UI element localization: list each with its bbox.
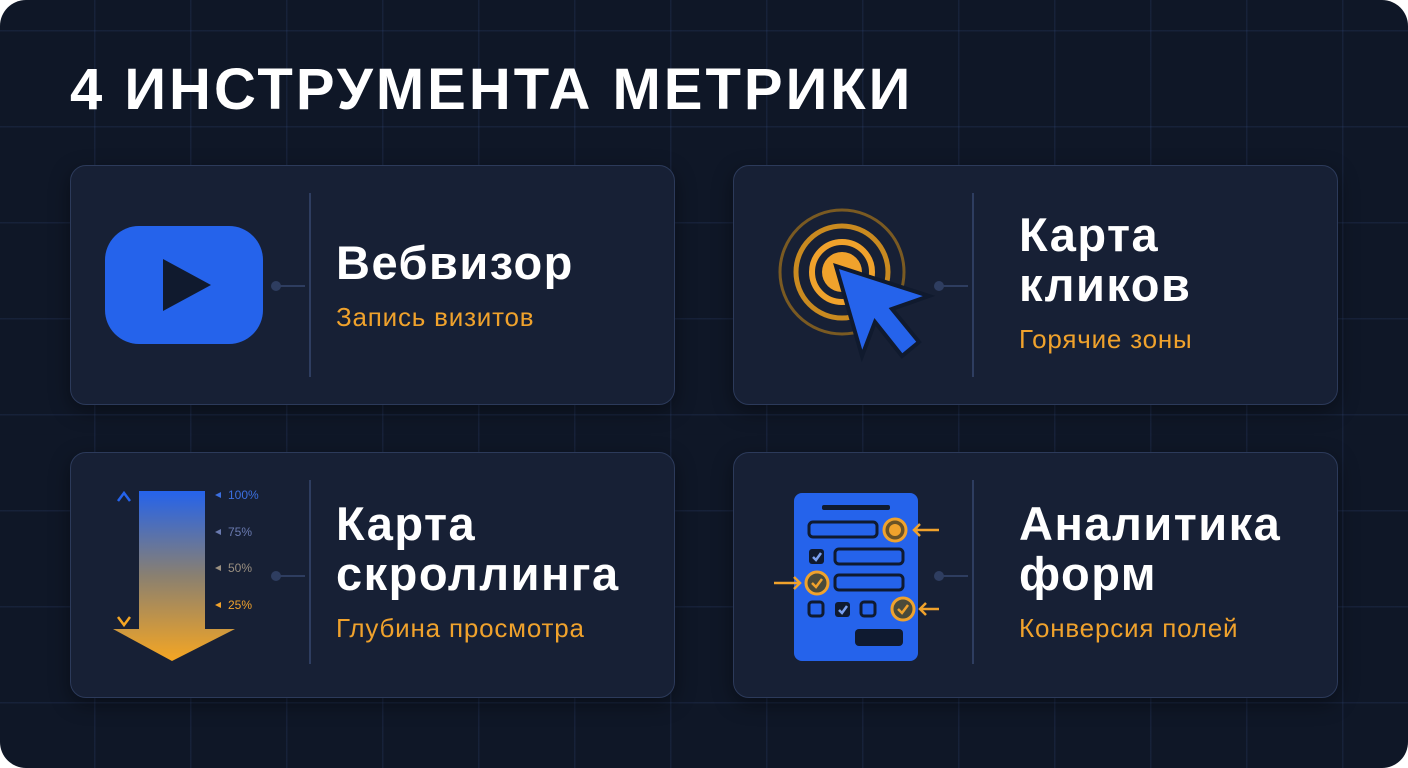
icon: scroll gradient arrow: 100% bbox=[228, 488, 259, 502]
panel: scroll map bbox=[70, 452, 675, 698]
icon: cursor with target bbox=[778, 208, 923, 354]
title: 4 ИНСТРУМЕНТА МЕТРИКИ bbox=[70, 57, 913, 122]
panel: form analytics bbox=[733, 452, 1338, 698]
text: scroll map: Карта bbox=[336, 497, 476, 550]
text: scroll map: скроллинга bbox=[336, 547, 620, 600]
text: webvisor bbox=[336, 236, 574, 332]
icon: scroll gradient arrow: 75% bbox=[228, 525, 252, 539]
text: webvisor: Запись визитов bbox=[336, 302, 534, 332]
text: webvisor: Вебвизор bbox=[336, 236, 574, 289]
text: click map bbox=[1019, 208, 1193, 354]
text: form analytics: форм bbox=[1019, 547, 1157, 600]
text: form analytics: Конверсия полей bbox=[1019, 613, 1238, 643]
panel: webvisor bbox=[70, 165, 675, 405]
text: scroll map: Глубина просмотра bbox=[336, 613, 585, 643]
text: click map: Горячие зоны bbox=[1019, 324, 1193, 354]
text: form analytics bbox=[1019, 497, 1281, 643]
icon: play button bbox=[105, 226, 263, 344]
text: click map: Карта bbox=[1019, 208, 1159, 261]
text: form analytics: Аналитика bbox=[1019, 497, 1281, 550]
icon: scroll gradient arrow bbox=[113, 488, 259, 661]
panel: click map bbox=[733, 165, 1338, 405]
text: scroll map bbox=[336, 497, 620, 643]
icon: form bbox=[774, 493, 939, 661]
icon: scroll gradient arrow: 25% bbox=[228, 598, 252, 612]
icon: scroll gradient arrow: 50% bbox=[228, 561, 252, 575]
text: click map: кликов bbox=[1019, 258, 1191, 311]
